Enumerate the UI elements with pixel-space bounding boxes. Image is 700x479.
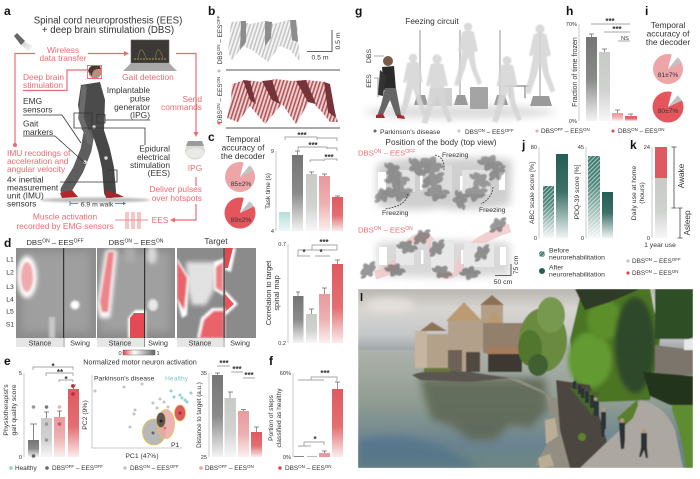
label: 6.9 m walk <box>70 201 126 208</box>
bar chart: physiotherapist score: Physiotherapist's <box>3 384 10 436</box>
label: gait markers: markers <box>23 127 53 137</box>
arrow: wireless to laptop <box>88 51 129 56</box>
legend: daily use: ON <box>645 257 652 262</box>
legend: panels g to h: ON <box>658 127 665 132</box>
label: inertial measurement units <box>7 174 59 208</box>
legend: before and after: After <box>549 264 564 272</box>
label: send commands: commands <box>161 102 202 112</box>
scale bar: 50 cm <box>494 279 513 286</box>
bar chart: task time: *** <box>297 131 308 140</box>
legend: panels g to h: OFF <box>505 128 514 133</box>
panel b: stick diagrams <box>208 4 342 128</box>
label: implantable pulse generator <box>107 85 150 120</box>
heading: position of the body: Position of the body (top view) <box>385 137 497 147</box>
phase labels: stance and swing: Stance <box>29 338 51 347</box>
heatmap: DBS on EES on: ON <box>156 238 164 244</box>
legend: panels c to f <box>9 464 332 472</box>
bracket: awake and asleep: Awake <box>677 163 686 188</box>
row label: DBS on EES off: OFF <box>216 15 221 25</box>
heatmap: DBS on EES on: ON <box>124 238 132 244</box>
panel d: spinal maps <box>4 236 343 357</box>
label: deep brain stimulation <box>23 72 64 90</box>
row label: DBS on EES on: DBS <box>217 110 224 123</box>
labels: DBS and EES sites <box>366 49 384 97</box>
bar chart: steps classified as healthy: Portion of steps <box>268 394 275 441</box>
bar chart: physiotherapist score: 0 <box>19 455 22 461</box>
bar chart: steps classified as healthy: classified as healthy <box>276 388 283 448</box>
bar chart: task time: 9 <box>271 149 274 155</box>
PCA scatter plot: PC1 (47%) <box>125 453 159 460</box>
baseline <box>226 69 340 71</box>
bar chart: correlation to target <box>264 238 343 347</box>
bar chart: physiotherapist score: gait quality score <box>11 384 18 436</box>
top view: DBS on EES off: DBS <box>358 148 374 158</box>
panel letter h: h <box>566 4 573 18</box>
legend: daily use: – EES <box>652 270 672 277</box>
bar chart: steps classified as healthy: 60% <box>280 371 291 377</box>
label: deliver pulses over hotspots: over hotspots <box>152 193 202 203</box>
scale bar: 0.5 m <box>335 32 342 50</box>
PCA scatter plot: Parkinson's disease <box>94 376 154 382</box>
label: implantable pulse generator: pulse <box>130 94 150 104</box>
legend: panels g to h: ON <box>478 128 485 133</box>
bar chart: steps classified as healthy: 0% <box>283 455 291 461</box>
spinal level labels: S1 <box>6 322 14 328</box>
heatmap: DBS on EES on: – EES <box>132 238 156 247</box>
legend: daily use <box>626 257 681 277</box>
heading: temporal accuracy <box>646 20 690 47</box>
heatmap: target: Target <box>204 236 228 246</box>
bar chart: correlation to target: 0.2 <box>278 341 286 347</box>
legend: daily use: ON <box>645 269 652 274</box>
panel letter k: k <box>630 138 637 152</box>
legend: panels c to f: DBS <box>130 465 143 472</box>
label: EMG sensors <box>23 96 52 114</box>
spinal level labels: L3 <box>6 284 14 291</box>
heatmap: DBS on EES off: DBS <box>26 238 42 247</box>
illustration: walking patient <box>40 65 150 202</box>
pie: 81%: 81±7% <box>658 72 678 79</box>
panel letter e: e <box>4 354 11 368</box>
label: deliver pulses over hotspots <box>149 184 202 203</box>
panel k: daily use at home <box>626 138 692 277</box>
legend: panels g to h: ON <box>631 127 638 132</box>
label: muscle activation: recorded by EMG sensors <box>16 221 114 231</box>
legend: daily use: OFF <box>672 257 681 262</box>
legend: daily use: DBS <box>632 258 645 265</box>
title: spinal cord neuroprosthesis: Spinal cord neuroprosthesis (EES) <box>34 16 182 26</box>
leader lines <box>23 113 150 182</box>
row label: DBS on EES off: DBS <box>217 51 224 64</box>
bar chart: physiotherapist score: 5 <box>19 371 22 377</box>
heading: temporal accuracy: Temporal <box>651 20 685 30</box>
label: IMU recordings: angular velocity <box>7 164 66 174</box>
heatmap: DBS on EES off: OFF <box>74 238 84 244</box>
icon: IPG device <box>185 141 205 160</box>
heatmap: DBS on EES on <box>97 238 175 338</box>
heading: temporal accuracy: Temporal <box>226 134 260 144</box>
panel letter l: l <box>360 292 363 304</box>
stacked bar: daily use: 0 <box>647 236 650 242</box>
colour scale: 1 <box>156 351 160 357</box>
legend: panels c to f: ON <box>325 464 332 469</box>
panel letter j: j <box>521 138 525 152</box>
label: EES: EES <box>152 215 169 225</box>
label: epidural electrical stimulation: Epidural <box>139 144 170 154</box>
pie: 89%: 89±2% <box>231 217 251 224</box>
bar chart: correlation to target: * <box>319 248 323 257</box>
bar chart: task time: Task time (s) <box>265 173 272 209</box>
spinal level labels: L2 <box>6 270 14 276</box>
arrow: IMU to wireless <box>13 54 35 147</box>
PCA scatter plot: P1 <box>171 442 180 449</box>
row label: DBS on EES off <box>216 15 224 72</box>
panel letter g: g <box>355 4 362 18</box>
panel j: clinical scores <box>521 138 613 278</box>
bar chart: ABC scale score <box>529 145 568 242</box>
icon: EMG signal traces <box>115 212 148 229</box>
top view: DBS on EES off: Freezing <box>442 152 469 159</box>
legend: panels c to f: – EES <box>227 465 247 472</box>
heading: temporal accuracy: the decoder <box>646 37 690 47</box>
panel f: portion of steps <box>268 354 343 461</box>
heading: temporal accuracy: accuracy of <box>222 142 265 152</box>
label: IPG: IPG <box>188 163 202 173</box>
stick diagram: DBS on EES on <box>227 79 338 124</box>
phase labels: stance and swing: Stance <box>189 338 211 347</box>
scale bar: 75 cm <box>513 255 520 274</box>
circuit illustration <box>365 23 555 124</box>
bar chart: time frozen: 70% <box>566 22 577 28</box>
legend: panels c to f: DBS <box>205 465 218 472</box>
heading: temporal accuracy <box>221 134 265 161</box>
label: implantable pulse generator: (IPG) <box>130 110 150 120</box>
PCA scatter plot: Healthy <box>165 376 189 382</box>
label: wireless data transfer: data transfer <box>39 53 87 63</box>
bracket: awake and asleep <box>672 147 692 238</box>
labels: DBS and EES sites: DBS <box>366 49 373 63</box>
title: spinal cord neuroprosthesis: + deep brain stimulation (DBS) <box>42 25 174 36</box>
bar chart: distance to target: 25 <box>201 455 207 461</box>
label: implantable pulse generator: generator <box>114 102 150 112</box>
spinal level labels: L1 <box>6 256 14 264</box>
label: deliver pulses over hotspots: Deliver pulses <box>149 184 202 194</box>
label: muscle activation: Muscle activation <box>33 212 97 222</box>
heatmap: DBS on EES off: – EES <box>50 238 74 247</box>
panel letter b: b <box>208 4 215 18</box>
label: EMG sensors: sensors <box>23 104 52 114</box>
top view: DBS on EES off: ON <box>374 149 382 155</box>
bar chart: distance to target: Distance to target (a.u.) <box>196 382 203 448</box>
bar chart: task time: 4 <box>271 229 274 235</box>
label: IMU recordings: IMU recodings of <box>7 148 71 158</box>
label: IMU recordings <box>7 148 71 174</box>
bar chart: distance to target: *** <box>232 365 243 374</box>
stacked bar: daily use <box>631 145 676 249</box>
box: DBS on head <box>88 66 102 78</box>
legend: before and after <box>539 248 605 278</box>
legend: panels g to h: – EES <box>563 128 583 135</box>
bar chart: task time <box>265 131 343 235</box>
spinal level labels: L4 <box>6 296 14 304</box>
bar chart: correlation to target: spinal map <box>272 275 281 311</box>
scale bar: 0.5 m <box>312 54 329 62</box>
legend: daily use: DBS <box>632 270 645 277</box>
label: muscle activation <box>16 212 114 231</box>
arrow: laptop to IPG <box>176 54 198 137</box>
legend: daily use: – EES <box>652 258 672 265</box>
label: gait markers: Gait <box>23 118 39 128</box>
bar chart: ABC scale score: ABC scale score [%] <box>529 162 536 224</box>
row label: DBS on EES off: ON <box>216 45 221 51</box>
legend: before and after: Before <box>549 248 569 254</box>
legend: panels c to f: – EES <box>150 465 170 472</box>
icon: motion capture camera <box>14 33 33 52</box>
label: EMG sensors: EMG <box>23 96 42 106</box>
label: deep brain stimulation: stimulation <box>23 80 63 90</box>
legend: panels g to h: Parkinson's disease <box>380 129 440 136</box>
bar chart: physiotherapist score: ** <box>57 368 64 377</box>
bracket: awake and asleep: Asleep <box>683 210 692 236</box>
row label: DBS on EES on: ON <box>216 103 221 110</box>
row label: DBS on EES on: – EES <box>217 83 224 103</box>
bar chart: physiotherapist score <box>3 362 79 461</box>
panel h: fraction of time frozen <box>566 4 637 125</box>
label: wireless data transfer: Wireless <box>47 45 79 55</box>
label: 6.9 m walk: 6.9 m walk <box>81 202 114 208</box>
bar chart: time frozen: NS <box>621 36 629 42</box>
bar chart: correlation to target: 0.7 <box>278 242 286 248</box>
legend: panels c to f: ON <box>247 464 254 469</box>
legend: panels g to h: – EES <box>638 128 658 135</box>
label: inertial measurement units: sensors <box>7 198 36 208</box>
legend: panels c to f: OFF <box>218 464 227 469</box>
row label: DBS on EES on <box>216 77 224 124</box>
legend: panels g to h <box>374 127 665 136</box>
stacked bar: daily use: (hours) <box>639 182 646 204</box>
panel i: temporal accuracy <box>645 4 690 122</box>
heading: normalized motor neuron activation: Normalized motor neuron activation <box>83 358 197 366</box>
label: gait detection: Gait detection <box>122 72 174 82</box>
panel a: system overview <box>4 4 205 231</box>
colour scale <box>118 350 160 357</box>
stacked bar: daily use: Daily use at home <box>631 166 638 220</box>
phase labels: stance and swing: Stance <box>109 338 131 347</box>
bar chart: PDQ-39 score: 0 <box>581 236 584 242</box>
panel l: photo of patient walking by lakeside castle <box>358 289 693 468</box>
label: epidural electrical stimulation: electrical <box>137 152 170 162</box>
stacked bar: daily use: 24 <box>644 145 650 151</box>
line: DBS to head <box>23 70 88 90</box>
heatmap: target <box>177 236 256 338</box>
bar chart: distance to target: 35 <box>201 371 207 377</box>
label: deep brain stimulation: Deep brain <box>23 72 64 82</box>
bar chart: time frozen: *** <box>612 25 623 34</box>
legend: panels c to f: – EES <box>305 465 325 472</box>
bar chart: task time: *** <box>308 141 319 150</box>
scale bar <box>494 255 520 286</box>
bar chart: PDQ-39 score: PDQ-39 score [%] <box>574 165 581 219</box>
stacked bar: daily use: 1 year use <box>644 242 676 249</box>
bar chart: time frozen: *** <box>605 17 616 26</box>
panel letter d: d <box>4 236 11 250</box>
pie: 85%: 85±2% <box>231 181 251 188</box>
top view: DBS on EES off: Freezing <box>382 210 409 217</box>
legend: panels c to f: ON <box>143 464 150 469</box>
legend: before and after: neurorehabilitation <box>549 254 605 262</box>
legend: panels c to f: OFF <box>94 464 103 469</box>
legend: panels c to f: OFF <box>65 464 74 469</box>
label: wireless data transfer <box>39 45 87 63</box>
legend: panels c to f: DBS <box>285 465 298 472</box>
label: implantable pulse generator: Implantable <box>107 85 150 95</box>
legend: panels c to f: – EES <box>74 465 94 472</box>
spinal level labels <box>6 256 14 328</box>
bar chart: steps classified as healthy: * <box>313 435 317 444</box>
legend: panels g to h: – EES <box>485 129 505 136</box>
label: inertial measurement units: unit (IMU) <box>7 190 44 200</box>
phase labels: stance and swing: Swing <box>230 338 250 347</box>
bar chart: correlation to target: Correlation to target <box>264 261 273 325</box>
heatmap: DBS on EES off <box>16 238 96 338</box>
labels: DBS and EES sites: EES <box>366 74 373 88</box>
bar chart: task time: *** <box>324 153 335 162</box>
bar chart: distance to target <box>196 359 262 461</box>
panel e: gait quality and PCA <box>3 354 262 461</box>
title: spinal cord neuroprosthesis <box>34 16 182 36</box>
colour scale: 0 <box>118 351 122 357</box>
panel letter c: c <box>208 130 215 144</box>
bar chart: ABC scale score: 0 <box>534 236 537 242</box>
bar chart: physiotherapist score: * <box>64 375 68 384</box>
label: send commands <box>161 94 202 112</box>
label: epidural electrical stimulation: stimulation <box>130 160 170 170</box>
legend: daily use: ON <box>672 269 679 274</box>
icon: laptop with gait traces <box>123 40 177 71</box>
spinal level labels: L5 <box>6 308 14 316</box>
row label: DBS on EES off: – EES <box>217 25 224 45</box>
bar chart: steps classified as healthy: *** <box>320 369 331 378</box>
bar chart: time frozen: Fraction of time frozen <box>572 37 579 107</box>
legend: panels c to f: Healthy <box>15 465 37 472</box>
pie: 80%: 80±7% <box>658 108 678 115</box>
top view: DBS on EES off: OFF <box>405 149 415 155</box>
stick diagram: DBS on EES off <box>228 20 300 62</box>
bar chart: correlation to target: *** <box>319 238 330 247</box>
top view: DBS on EES on <box>355 214 510 284</box>
top view: DBS on EES off <box>358 148 512 217</box>
phase labels: stance and swing <box>16 338 250 347</box>
label: epidural electrical stimulation: (EES) <box>148 168 170 178</box>
top view: DBS on EES on: ON <box>374 226 382 232</box>
top view: DBS on EES off: Freezing <box>479 207 506 214</box>
top view: DBS on EES off: – EES <box>381 148 405 158</box>
scale bar <box>307 30 342 62</box>
arrow: IPG down <box>195 177 197 186</box>
label: send commands: Send <box>182 94 202 104</box>
panel letter f: f <box>269 354 274 368</box>
legend: panels g to h: DBS <box>465 129 478 136</box>
panel c: temporal accuracy and task time <box>208 130 343 235</box>
top view: DBS on EES on: – EES <box>381 226 405 234</box>
panel letter i: i <box>645 4 648 18</box>
bar chart: distance to target: *** <box>219 359 230 368</box>
bar chart: time frozen: 0% <box>569 119 577 125</box>
bar chart: distance to target: *** <box>244 371 255 380</box>
legend: panels g to h: DBS <box>618 128 631 135</box>
legend: panels c to f: OFF <box>170 464 179 469</box>
legend: panels g to h: ON <box>583 127 590 132</box>
heading: freezing circuit: Feezing circuit <box>405 16 459 26</box>
legend: panels c to f: DBS <box>52 465 65 472</box>
PCA scatter plot <box>82 375 192 460</box>
label: gait markers <box>23 118 53 137</box>
bar chart: physiotherapist score: * <box>51 362 55 371</box>
label: IMU recordings: acceleration and <box>7 156 69 166</box>
panel g: freezing circuit <box>355 4 665 286</box>
top view: DBS on EES on: ON <box>405 226 413 232</box>
row label: DBS on EES on: ON <box>216 77 221 83</box>
baseline <box>226 127 340 129</box>
phase labels: stance and swing: Swing <box>148 338 168 347</box>
bar chart: time frozen <box>566 17 637 125</box>
heatmap: DBS on EES on: DBS <box>109 238 124 247</box>
heatmap: DBS on EES off: ON <box>42 238 50 244</box>
bar chart: correlation to target: * <box>302 248 306 257</box>
panel letter a: a <box>4 4 11 18</box>
PCA scatter plot: PC2 (9%) <box>82 400 89 430</box>
label: epidural electrical stimulation <box>130 144 170 178</box>
heading: temporal accuracy: accuracy of <box>647 28 690 38</box>
arrow: hotspots to EES <box>170 204 196 222</box>
bar chart: steps classified as healthy <box>268 369 343 461</box>
legend: panels g to h: DBS <box>541 128 554 135</box>
legend: panels c to f: ON <box>298 464 305 469</box>
heading: temporal accuracy: the decoder <box>221 151 265 161</box>
bar chart: ABC scale score: 80 <box>531 145 537 151</box>
bar chart: PDQ-39 score: 45 <box>578 145 584 151</box>
legend: before and after: neurorehabilitation <box>549 272 605 278</box>
top view: DBS on EES on: DBS <box>358 226 374 234</box>
phase labels: stance and swing: Swing <box>70 338 90 347</box>
label: inertial measurement units: 4× inertial <box>7 174 44 184</box>
bar chart: PDQ-39 score <box>574 145 613 242</box>
legend: panels g to h: OFF <box>554 127 563 132</box>
label: inertial measurement units: measurement <box>7 182 59 192</box>
